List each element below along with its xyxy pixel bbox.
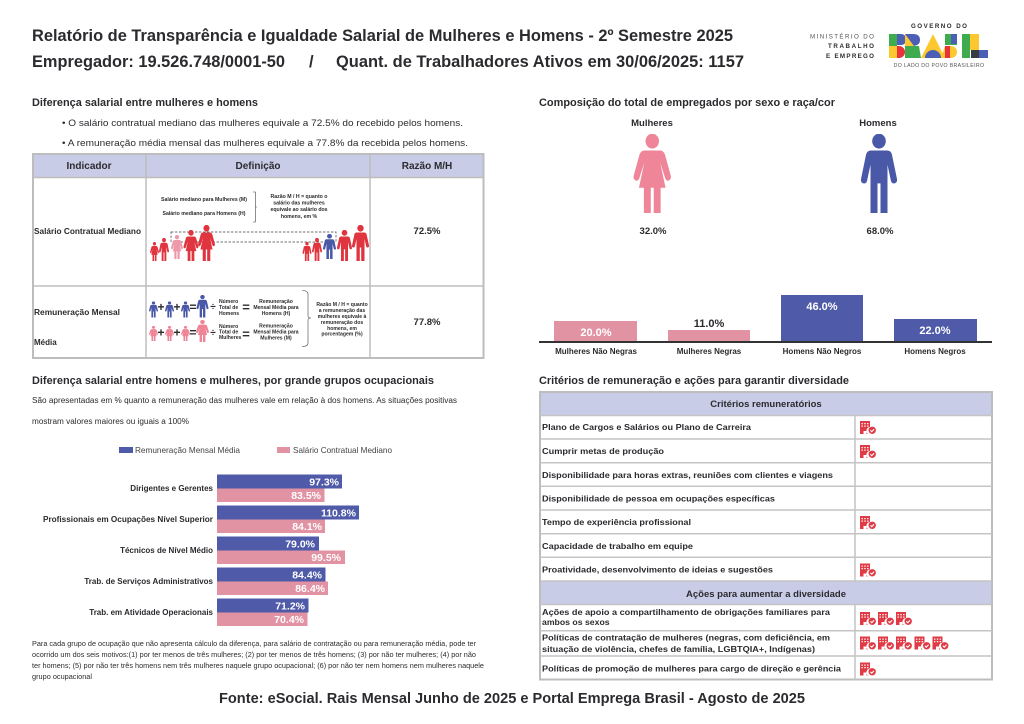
bar chart: sex and race: 22.0%: [919, 325, 951, 337]
diagram: average pay definition: =: [189, 300, 197, 314]
group: managers: [130, 474, 342, 502]
row: average monthly pay: Remuneração Mensal: [34, 308, 120, 317]
icons: company adopts criterion: [860, 421, 948, 676]
criteria rows: [542, 422, 833, 574]
description: São apresentadas em % quanto a remuneração das mulheres vale em relação à dos homens. As situações positivas: [32, 396, 457, 405]
criteria rows: Tempo de experiência profissional: [542, 517, 691, 527]
diagram: average pay definition: Total de: [219, 305, 238, 311]
title line 1: Relatório de Transparência e Igualdade Salarial de Mulheres e Homens - 2º Semestre 2025: [32, 27, 733, 45]
criteria rows: Cumprir metas de produção: [542, 446, 664, 456]
diagram: average pay definition: Número: [219, 299, 238, 305]
diagram: median salary definition: Salário mediano para Mulheres (M): [161, 197, 247, 203]
group: operational: Trab. em Atividade Operacionais: [89, 608, 214, 617]
group: technicians: [120, 536, 345, 564]
diagram: average pay definition: Número: [219, 324, 238, 330]
diagram: average pay definition: Homens (H): [262, 311, 291, 317]
diagram: average pay definition: +: [157, 326, 165, 340]
title line 2: Empregador: 19.526.748/0001-50: [32, 53, 285, 71]
action rows: Ações de apoio a compartilhamento de obrigações familiares para: [542, 607, 830, 617]
bar chart: sex and race: 11.0%: [694, 318, 725, 330]
criteria table: [540, 392, 992, 680]
bar chart: sex and race: 20.0%: [580, 327, 612, 339]
legend: [119, 445, 392, 455]
logo blocks: [889, 34, 988, 58]
diagram: median salary definition: [150, 192, 369, 261]
criteria rows: Capacidade de trabalho em equipe: [542, 541, 693, 551]
column headers: Razão M/H: [402, 161, 452, 172]
men figure: [859, 118, 897, 237]
diagram: median salary definition: salário das mulheres: [273, 200, 325, 206]
row: median contract salary: Salário Contratual Mediano: [34, 227, 141, 236]
group: operational: 71.2%: [275, 600, 306, 612]
panel: salary gap between women and men: [32, 97, 484, 358]
diagram: average pay definition: ÷: [210, 328, 216, 339]
group: managers: 97.3%: [309, 476, 340, 488]
panel: workforce composition by sex and race: [539, 97, 992, 356]
diagram: average pay definition: [149, 290, 368, 346]
row: average monthly pay: 77.8%: [414, 317, 441, 328]
description: [32, 396, 457, 426]
action rows: [542, 607, 841, 674]
bar chart: sex and race: Mulheres Não Negras: [555, 347, 637, 356]
women figure: 32.0%: [640, 226, 667, 237]
column headers: [66, 161, 452, 172]
group: administrative: 86.4%: [295, 583, 326, 595]
section header: actions: Ações para aumentar a diversidade: [686, 589, 846, 600]
group: managers: Dirigentes e Gerentes: [130, 484, 214, 493]
diagram: average pay definition: +: [173, 326, 181, 340]
bar chart: sex and race: Homens Não Negros: [783, 347, 862, 356]
column headers: Definição: [235, 161, 281, 172]
legend: Salário Contratual Mediano: [293, 445, 392, 455]
footnote: ter homens; (5) por não ter três homens nem três mulheres naquele grupo ocupacional; (6) por não ter nem homens nem mulheres naquele: [32, 663, 484, 670]
row: median contract salary: [34, 226, 441, 237]
logo: ministry: MINISTÉRIO DO: [810, 34, 874, 40]
heading: Diferença salarial entre homens e mulheres, por grande grupos ocupacionais: [32, 375, 434, 387]
diagram: average pay definition: Total de: [219, 330, 238, 336]
diagram: average pay definition: Mensal Média para: [253, 330, 299, 336]
heading: Composição do total de empregados por sexo e raça/cor: [539, 97, 836, 109]
diagram: average pay definition: Mensal Média para: [253, 305, 299, 311]
group: technicians: 79.0%: [285, 538, 316, 550]
logo: government of Brazil: GOVERNO DO: [911, 23, 967, 30]
diagram: median salary definition: Razão M / H = quanto o: [271, 194, 327, 200]
logo: government of Brazil: DO LADO DO POVO BRASILEIRO: [894, 63, 984, 69]
group: administrative: Trab. de Serviços Administrativos: [84, 577, 214, 586]
row: median contract salary: 72.5%: [414, 226, 441, 237]
criteria rows: Disponibilidade de pessoa em ocupações específicas: [542, 494, 775, 504]
diagram: average pay definition: Homens: [219, 311, 239, 317]
description: mostram valores maiores ou iguais a 100%: [32, 417, 189, 426]
criteria rows: Disponibilidade para horas extras, reuniões com clientes e viagens: [542, 470, 833, 480]
footnote: Para cada grupo de ocupação que não apresenta cálculo da diferença, para salário de contratação ou para remuneração média, pode ter: [32, 641, 477, 648]
group: professionals: Profissionais em Ocupações Nível Superior: [43, 515, 213, 524]
diagram: average pay definition: =: [242, 300, 250, 314]
group: managers: 83.5%: [291, 490, 322, 502]
group: technicians: Técnicos de Nível Médio: [120, 546, 213, 555]
bar chart: occupational groups: [43, 474, 359, 626]
column headers: Indicador: [66, 161, 112, 172]
heading: Critérios de remuneração e ações para garantir diversidade: [539, 375, 849, 387]
group: administrative: [84, 568, 328, 595]
people: men group: [302, 225, 369, 261]
group: professionals: 84.1%: [292, 521, 323, 533]
diagram: average pay definition: a remuneração das: [319, 308, 365, 314]
action rows: Políticas de promoção de mulheres para cargo de direção e gerência: [542, 664, 841, 674]
diagram: average pay definition: Remuneração: [259, 324, 293, 330]
diagram: average pay definition: Razão M / H = quanto: [316, 302, 368, 308]
bar chart: sex and race: [539, 295, 992, 356]
row: average monthly pay: [34, 308, 441, 347]
bar chart: sex and race: Homens Negros: [904, 347, 966, 356]
footnote: [32, 641, 484, 681]
title separator: /: [309, 53, 314, 71]
panel: salary gap by occupational group: [32, 375, 484, 681]
header title: [32, 27, 744, 71]
diagram: median salary definition: Salário mediano para Homens (H): [162, 211, 246, 217]
footnote: ocorrido um dos seis motivos:(1) por ter menos de três mulheres; (2) por ter menos de três homens; (3) por não ter mulheres; (4) por não: [32, 652, 476, 659]
criteria rows: Proatividade, desenvolvimento de ideias e sugestões: [542, 564, 773, 574]
bullet 2: • A remuneração média mensal das mulheres equivale a 77.8% da recebida pelos homens.: [62, 138, 468, 149]
men figure: Homens: [859, 118, 897, 129]
panel: pay criteria and diversity actions: [539, 375, 992, 680]
source line: Fonte: eSocial. Rais Mensal Junho de 2025 e Portal Emprega Brasil - Agosto de 2025: [219, 691, 805, 707]
logo: ministry: [810, 34, 874, 60]
diagram: median salary definition: homens, em %: [281, 214, 318, 220]
workers count: Quant. de Trabalhadores Ativos em 30/06/2025: 1157: [336, 53, 744, 71]
diagram: average pay definition: =: [189, 326, 197, 340]
row: average monthly pay: Média: [34, 338, 57, 347]
bar chart: sex and race: 46.0%: [806, 301, 838, 313]
footnote: grupo ocupacional: [32, 674, 92, 681]
action rows: ambos os sexos: [542, 617, 610, 627]
diagram: median salary definition: equivale ao salário dos: [270, 207, 328, 213]
group: operational: [89, 598, 308, 626]
action rows: Políticas de contratação de mulheres (negras, com deficiência, em: [542, 632, 830, 642]
diagram: average pay definition: porcentagem (%): [321, 332, 363, 338]
group: operational: 70.4%: [274, 614, 305, 626]
indicator table: [33, 154, 484, 358]
diagram: average pay definition: =: [242, 326, 250, 342]
section header: criteria: Critérios remuneratórios: [710, 399, 822, 410]
logo: ministry: E EMPREGO: [826, 53, 874, 60]
group: technicians: 99.5%: [311, 552, 342, 564]
diagram: average pay definition: Remuneração: [259, 299, 293, 305]
diagram: average pay definition: ÷: [210, 302, 216, 313]
diagram: average pay definition: Mulheres (M): [260, 336, 292, 342]
diagram: average pay definition: Mulheres: [219, 335, 242, 341]
legend: Remuneração Mensal Média: [135, 445, 240, 455]
women figure: [631, 118, 673, 237]
diagram: average pay definition: remuneração dos: [321, 320, 363, 326]
logo: government of Brazil: [889, 23, 988, 69]
criteria rows: Plano de Cargos e Salários ou Plano de Carreira: [542, 422, 751, 432]
bar chart: sex and race: Mulheres Negras: [677, 347, 742, 356]
group: administrative: 84.4%: [292, 570, 323, 582]
action rows: situação de violência, chefes de família, LGBTQIA+, Indígenas): [542, 644, 815, 654]
men figure: 68.0%: [867, 226, 894, 237]
diagram: average pay definition: +: [173, 300, 181, 314]
women figure: Mulheres: [631, 118, 673, 129]
diagram: average pay definition: homens, em: [327, 326, 357, 332]
diagram: average pay definition: mulheres equivale à: [318, 314, 367, 320]
group: professionals: [43, 506, 359, 533]
people: women group: [150, 225, 215, 261]
logo: ministry: TRABALHO: [828, 43, 874, 50]
heading: Diferença salarial entre mulheres e homens: [32, 97, 258, 109]
diagram: average pay definition: +: [157, 300, 165, 314]
bullet 1: • O salário contratual mediano das mulheres equivale a 72.5% do recebido pelos homens.: [62, 118, 463, 129]
group: professionals: 110.8%: [321, 508, 357, 520]
